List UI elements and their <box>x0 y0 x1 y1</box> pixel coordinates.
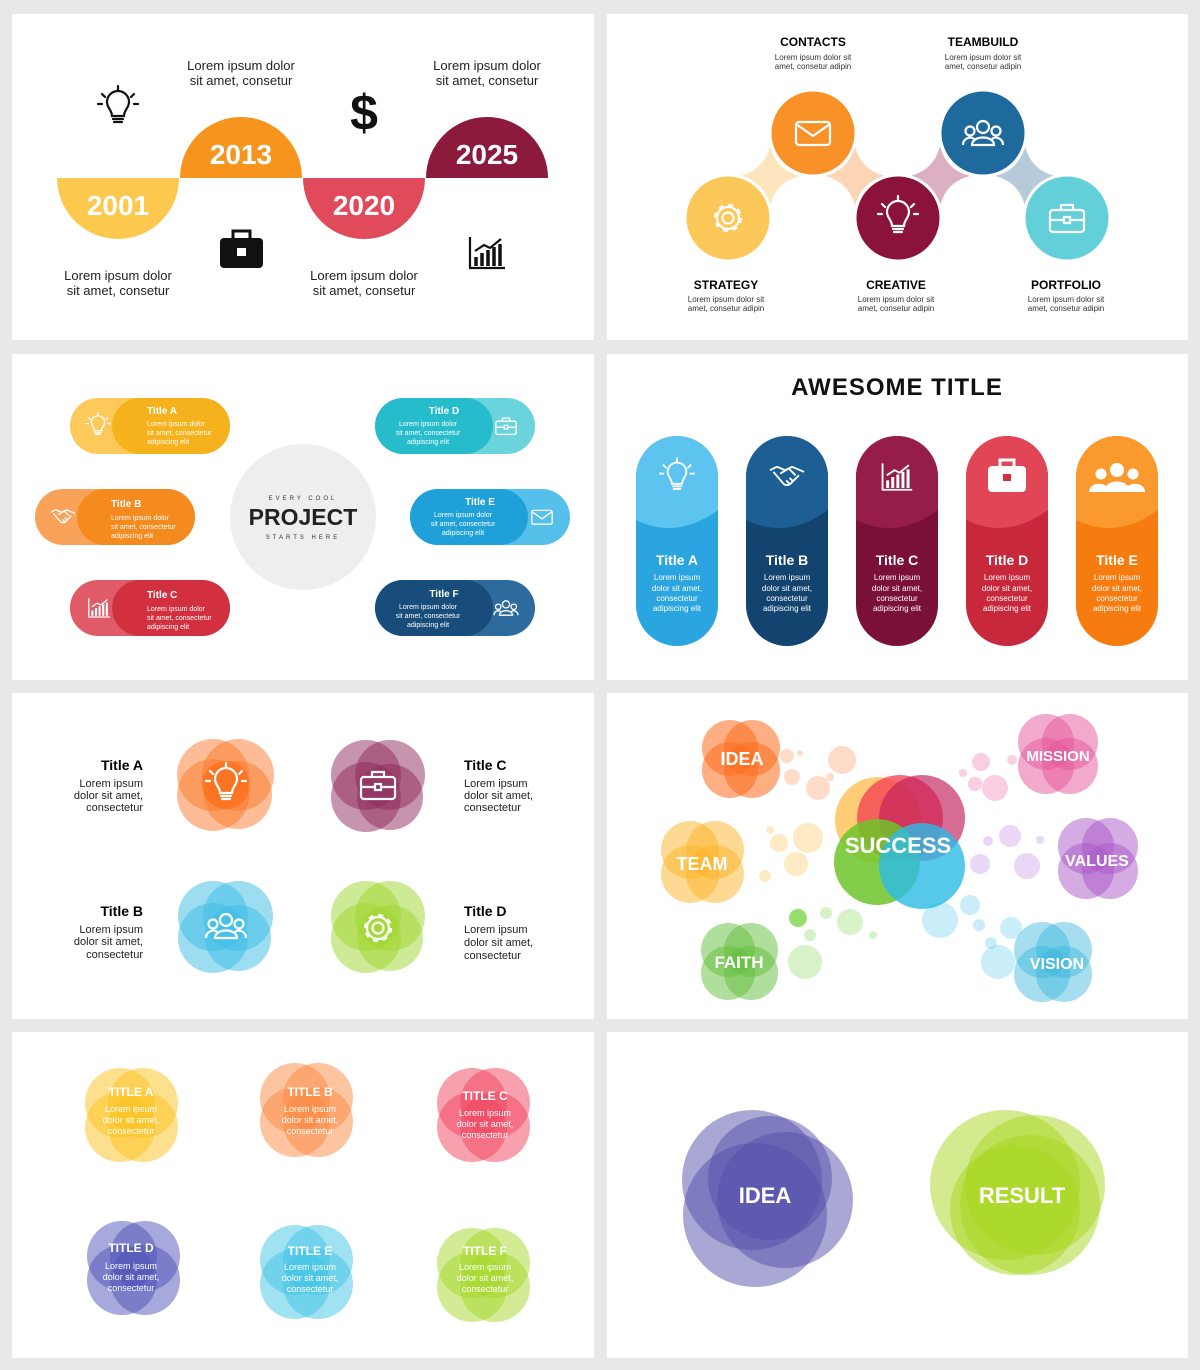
timeline 2025 <box>426 117 548 178</box>
pill: Title B: Lorem ipsum dolor <box>111 515 170 522</box>
bubble: team: TEAM <box>676 854 728 874</box>
circle: strategy <box>685 175 771 261</box>
column: Title A: consectetur <box>656 594 698 603</box>
label: creative: Lorem ipsum dolor sit <box>858 295 935 304</box>
pill: Title C: adipiscing elit <box>147 624 189 631</box>
label: creative: CREATIVE <box>866 278 926 292</box>
text: Title A <box>74 757 143 814</box>
bubble: faith <box>701 923 778 1000</box>
pill: Title F: Title F <box>429 589 459 600</box>
text: Title C: Lorem ipsum <box>464 778 528 790</box>
panel: awesome title columns <box>607 354 1188 680</box>
blob: TITLE B: dolor sit amet, <box>282 1115 338 1125</box>
text: Title B: consectetur <box>86 949 143 961</box>
icon: dollar: $ <box>350 85 378 141</box>
label: portfolio: amet, consetur adipin <box>1028 304 1104 313</box>
timeline 2025: 2025 <box>456 139 518 170</box>
label: contacts <box>775 35 852 71</box>
column: Title D: Title D <box>986 552 1028 568</box>
text 2025: Lorem ipsum dolor <box>433 58 541 73</box>
center circle: EVERY COOL <box>269 496 337 502</box>
column: Title C: Title C <box>876 552 918 568</box>
circle: portfolio <box>1024 175 1110 261</box>
bubble: mission: MISSION <box>1026 748 1090 765</box>
connectors <box>740 146 1055 206</box>
column: Title D: Lorem ipsum <box>984 573 1030 582</box>
label: contacts: Lorem ipsum dolor sit <box>775 53 852 62</box>
column: Title E: Lorem ipsum <box>1094 573 1140 582</box>
pill: Title B <box>35 489 195 545</box>
label: contacts: CONTACTS <box>780 35 846 49</box>
column: Title E: dolor sit amet, <box>1092 584 1142 593</box>
text: Title D: consectetur <box>464 950 521 962</box>
blob: TITLE D: consectetur <box>108 1283 154 1293</box>
blob: TITLE A <box>85 1068 178 1162</box>
blob: TITLE C: TITLE C <box>462 1089 508 1103</box>
bubble: faith: FAITH <box>714 953 764 972</box>
blob: TITLE C <box>437 1068 530 1162</box>
text: Title C: dolor sit amet, <box>464 790 533 802</box>
icon: lightbulb <box>98 86 138 122</box>
pill: Title D: adipiscing elit <box>407 439 449 446</box>
text: Title A: Title A <box>101 757 143 773</box>
text: Title B: dolor sit amet, <box>74 936 143 948</box>
pill: Title E: Lorem ipsum dolor <box>434 512 493 519</box>
blob: TITLE E: TITLE E <box>288 1244 332 1258</box>
timeline 2001: 2001 <box>87 190 149 221</box>
pill: Title B: sit amet, consectetur <box>111 524 176 531</box>
label: portfolio <box>1028 278 1105 313</box>
pill: Title C: Lorem ipsum dolor <box>147 606 206 613</box>
text 2013: Lorem ipsum dolor <box>187 58 295 73</box>
pill: Title E: adipiscing elit <box>442 530 484 537</box>
text: Title D: Lorem ipsum <box>464 924 528 936</box>
text: Title C: consectetur <box>464 802 521 814</box>
blob: TITLE B: Lorem ipsum <box>284 1104 336 1114</box>
blob: TITLE A: Lorem ipsum <box>105 1104 157 1114</box>
timeline 2001 <box>57 178 179 239</box>
column: Title C <box>856 436 938 646</box>
circle: creative <box>855 175 941 261</box>
icon: chart <box>470 237 505 268</box>
blob: RESULT <box>930 1110 1105 1275</box>
label: teambuild <box>945 35 1022 71</box>
label: contacts: amet, consetur adipin <box>775 62 851 71</box>
pill: Title E: sit amet, consectetur <box>431 521 496 528</box>
pill: Title F: sit amet, consectetur <box>396 613 461 620</box>
pill: Title F: adipiscing elit <box>407 622 449 629</box>
text: Title D: Title D <box>464 903 507 919</box>
panel: six title blobs <box>12 1032 594 1358</box>
text 2020: Lorem ipsum dolor <box>310 268 418 283</box>
column: Title E: Title E <box>1096 552 1138 568</box>
column: Title B: dolor sit amet, <box>762 584 812 593</box>
label: teambuild: TEAMBUILD <box>948 35 1019 49</box>
label: portfolio: PORTFOLIO <box>1031 278 1101 292</box>
blob: orange bulb <box>177 739 274 831</box>
blob: TITLE A: consectetur <box>108 1126 154 1136</box>
blob: TITLE D: dolor sit amet, <box>103 1272 159 1282</box>
pill: Title A: adipiscing elit <box>147 439 189 446</box>
text: Title C: Title C <box>464 757 507 773</box>
bubble: success: SUCCESS <box>845 833 951 858</box>
column: Title B: consectetur <box>766 594 808 603</box>
column: Title D: dolor sit amet, <box>982 584 1032 593</box>
blob: TITLE E: dolor sit amet, <box>282 1273 338 1283</box>
blob: green gear <box>331 881 425 973</box>
panel: timeline <box>12 14 594 340</box>
timeline 2013: 2013 <box>210 139 272 170</box>
circle: teambuild <box>940 90 1026 176</box>
blob: RESULT: RESULT <box>979 1183 1066 1208</box>
column: Title E: adipiscing elit <box>1093 604 1142 613</box>
blob: TITLE D: TITLE D <box>108 1241 154 1255</box>
circle: contacts <box>770 90 856 176</box>
pill: Title A: Lorem ipsum dolor <box>147 421 206 428</box>
pill: Title C <box>70 580 230 636</box>
column: Title B: Title B <box>766 552 808 568</box>
blob: TITLE C: consectetur <box>462 1130 508 1140</box>
column: Title B <box>746 436 828 646</box>
pill: Title D <box>375 398 535 454</box>
panel: four blobs <box>12 693 594 1019</box>
pill: Title A: Title A <box>147 406 177 417</box>
pill: Title F <box>375 580 535 636</box>
panel: process circles <box>607 14 1188 340</box>
blob: TITLE F <box>437 1228 530 1322</box>
column: Title B: adipiscing elit <box>763 604 812 613</box>
column: Title D: consectetur <box>986 594 1028 603</box>
label: strategy: amet, consetur adipin <box>688 304 764 313</box>
text: Title C <box>464 757 533 814</box>
pill: Title A: sit amet, consectetur <box>147 430 212 437</box>
text 2001: sit amet, consetur <box>67 283 170 298</box>
text: Title A: consectetur <box>86 802 143 814</box>
blob: blue people <box>178 881 273 973</box>
bubble: vision: VISION <box>1030 956 1084 973</box>
pill: Title C: sit amet, consectetur <box>147 615 212 622</box>
blob: TITLE E <box>260 1225 353 1319</box>
center circle: PROJECT <box>249 504 357 530</box>
label: portfolio: Lorem ipsum dolor sit <box>1028 295 1105 304</box>
bubble: values: VALUES <box>1065 853 1129 870</box>
column: Title C: adipiscing elit <box>873 604 922 613</box>
small dots <box>759 746 1044 979</box>
label: teambuild: amet, consetur adipin <box>945 62 1021 71</box>
blob: TITLE D: Lorem ipsum <box>105 1261 157 1271</box>
column: Title A: dolor sit amet, <box>652 584 702 593</box>
column: Title C: dolor sit amet, <box>872 584 922 593</box>
bubble: idea: IDEA <box>720 749 764 769</box>
blob: TITLE A: TITLE A <box>109 1085 154 1099</box>
label: creative <box>858 278 935 313</box>
text: Title B: Lorem ipsum <box>79 924 143 936</box>
text: Title D: dolor sit amet, <box>464 937 533 949</box>
text: Title A: Lorem ipsum <box>79 778 143 790</box>
text 2020: sit amet, consetur <box>313 283 416 298</box>
pill: Title D: Lorem ipsum dolor <box>399 421 458 428</box>
blob: maroon briefcase <box>331 740 425 832</box>
blob: IDEA <box>682 1110 853 1287</box>
blob: TITLE F: consectetur <box>462 1284 508 1294</box>
center circle <box>230 444 376 590</box>
column: Title A: Lorem ipsum <box>654 573 700 582</box>
heading: AWESOME TITLE <box>791 374 1003 401</box>
blob: TITLE B <box>260 1063 353 1157</box>
timeline 2013 <box>180 117 302 178</box>
blob: TITLE B: consectetur <box>287 1126 333 1136</box>
column: Title D <box>966 436 1048 646</box>
column: Title C: consectetur <box>876 594 918 603</box>
blob: IDEA: IDEA <box>739 1183 791 1208</box>
text: Title B: Title B <box>100 903 143 919</box>
label: teambuild: Lorem ipsum dolor sit <box>945 53 1022 62</box>
text: Title B <box>74 903 143 961</box>
text 2025: sit amet, consetur <box>436 73 539 88</box>
pill: Title E <box>410 489 570 545</box>
column: Title E <box>1076 436 1158 646</box>
blob: TITLE F: dolor sit amet, <box>457 1273 513 1283</box>
pill: Title D: sit amet, consectetur <box>396 430 461 437</box>
bubble: vision <box>1014 922 1092 1002</box>
blob: TITLE B: TITLE B <box>287 1085 333 1099</box>
label: strategy <box>688 278 765 313</box>
blob: TITLE C: Lorem ipsum <box>459 1108 511 1118</box>
blob: TITLE D <box>87 1221 180 1315</box>
column: Title B: Lorem ipsum <box>764 573 810 582</box>
text: Title D <box>464 903 533 962</box>
column: Title C: Lorem ipsum <box>874 573 920 582</box>
bubble: success <box>834 775 965 909</box>
pill: Title A <box>70 398 230 454</box>
pill: Title D: Title D <box>429 406 459 417</box>
pill: Title B: adipiscing elit <box>111 533 153 540</box>
blob: TITLE E: consectetur <box>287 1284 333 1294</box>
text: Title A: dolor sit amet, <box>74 790 143 802</box>
bubble: values <box>1058 818 1138 899</box>
label: strategy: STRATEGY <box>694 278 758 292</box>
blob: TITLE C: dolor sit amet, <box>457 1119 513 1129</box>
timeline 2020 <box>303 178 425 239</box>
panel: idea result <box>607 1032 1188 1358</box>
center circle: STARTS HERE <box>266 535 340 541</box>
bubble: idea <box>702 720 780 798</box>
panel: project pills <box>12 354 594 680</box>
blob: TITLE F: TITLE F <box>463 1244 507 1258</box>
column: Title A: adipiscing elit <box>653 604 702 613</box>
column: Title A: Title A <box>656 552 698 568</box>
text 2001: Lorem ipsum dolor <box>64 268 172 283</box>
column: Title A <box>636 436 718 646</box>
blob: TITLE E: Lorem ipsum <box>284 1262 336 1272</box>
pill: Title B: Title B <box>111 499 141 510</box>
text 2013: sit amet, consetur <box>190 73 293 88</box>
timeline 2020: 2020 <box>333 190 395 221</box>
pill: Title C: Title C <box>147 590 177 601</box>
pill: Title F: Lorem ipsum dolor <box>399 604 458 611</box>
blob: TITLE A: dolor sit amet, <box>103 1115 159 1125</box>
bubble: team <box>661 821 744 903</box>
label: strategy: Lorem ipsum dolor sit <box>688 295 765 304</box>
column: Title E: consectetur <box>1096 594 1138 603</box>
pill: Title E: Title E <box>465 497 495 508</box>
blob: TITLE F: Lorem ipsum <box>459 1262 511 1272</box>
label: creative: amet, consetur adipin <box>858 304 934 313</box>
column: Title D: adipiscing elit <box>983 604 1032 613</box>
icon: briefcase <box>220 231 263 268</box>
bubble: mission <box>1018 714 1098 794</box>
panel: success bubbles <box>607 693 1188 1019</box>
